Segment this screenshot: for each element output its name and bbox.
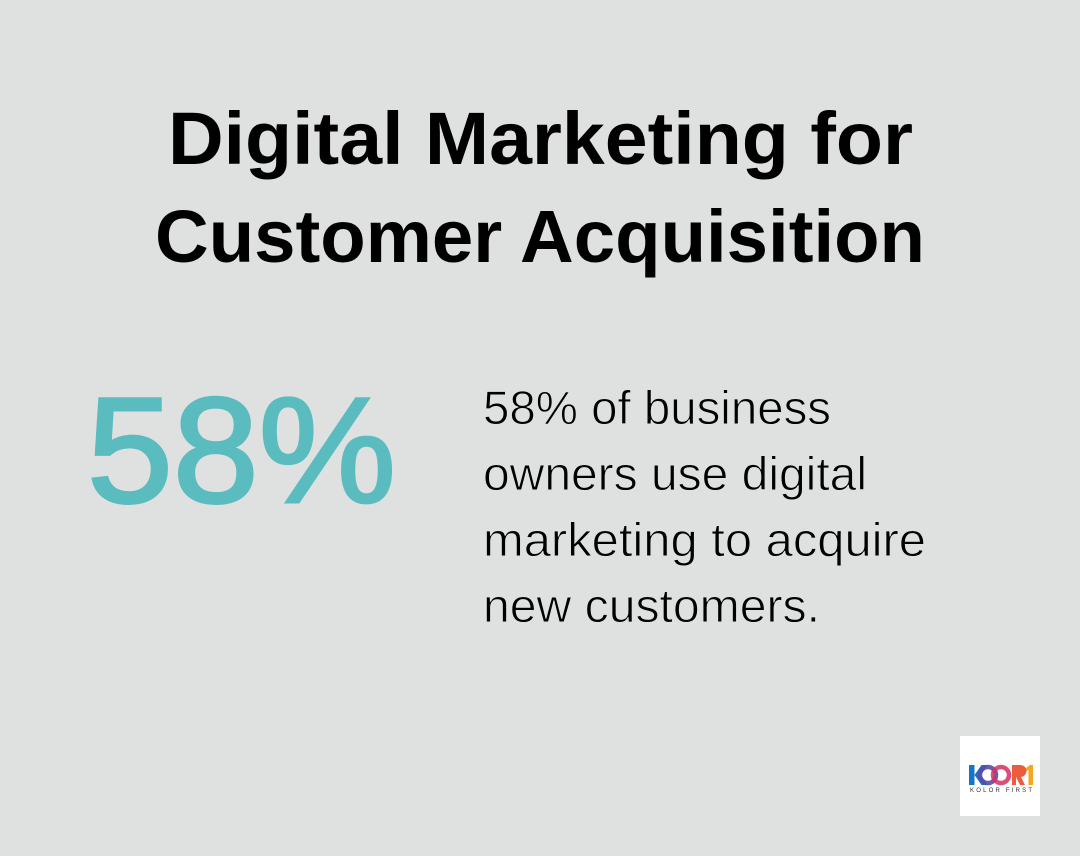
description text: owners use digital — [483, 447, 867, 500]
description text: 58% of business — [483, 381, 831, 434]
title: Digital Marketing for — [168, 97, 913, 180]
description text: marketing to acquire — [483, 513, 926, 566]
description text: new customers. — [483, 579, 820, 632]
logo wordmark — [969, 765, 1033, 785]
title — [155, 97, 925, 278]
title: Customer Acquisition — [155, 195, 925, 278]
description text — [483, 381, 926, 632]
big stat: 58%: 58% — [87, 366, 396, 534]
logo tagline: KOLOR FIRST — [970, 788, 1032, 794]
logo: Koor1 Kolor First — [960, 736, 1040, 816]
